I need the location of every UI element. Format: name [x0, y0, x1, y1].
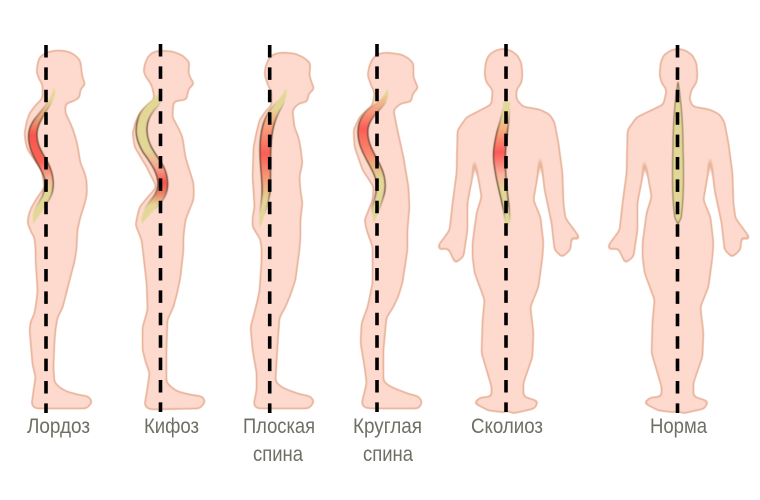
dashed axis: flat back	[268, 45, 272, 413]
body silhouette: kyphosis	[132, 50, 206, 410]
spine: kyphosis	[136, 92, 168, 224]
label: Плоская спина	[243, 415, 315, 466]
figure: scoliosis	[438, 44, 580, 414]
figure: round back	[353, 44, 423, 412]
spine: round back	[358, 89, 388, 224]
dashed axis: lordosis	[44, 45, 48, 413]
spine: flat back	[259, 88, 286, 228]
spine: normal	[673, 82, 683, 224]
label: Круглая спина	[353, 415, 422, 466]
label: Кифоз: Кифоз	[144, 415, 199, 438]
label: Плоская спина: Плоская	[243, 415, 315, 438]
dashed axis: round back	[375, 44, 379, 412]
label: Лордоз: Лордоз	[27, 415, 90, 438]
figure: flat back	[250, 45, 315, 413]
dashed axis: scoliosis	[504, 44, 508, 412]
dashed axis: kyphosis	[159, 44, 162, 412]
label: Плоская спина: спина	[253, 443, 303, 466]
spine: lordosis	[29, 87, 55, 224]
label: Норма: Норма	[650, 415, 707, 438]
label: Круглая спина: Круглая	[353, 415, 422, 438]
body silhouette: normal	[608, 48, 750, 414]
body silhouette: scoliosis	[438, 48, 580, 414]
body silhouette: flat back	[250, 52, 315, 409]
body silhouette: lordosis	[24, 50, 93, 409]
spine: scoliosis	[494, 102, 510, 226]
dashed axis: normal	[676, 45, 679, 413]
figure: normal	[608, 45, 750, 414]
label: Круглая спина: спина	[363, 443, 413, 466]
leg divider: scoliosis	[506, 257, 508, 408]
body silhouette: round back	[353, 52, 423, 409]
label: Сколиоз: Сколиоз	[471, 415, 543, 438]
leg divider: normal	[676, 257, 678, 408]
figure: lordosis	[24, 45, 93, 413]
figure: kyphosis	[132, 44, 206, 412]
